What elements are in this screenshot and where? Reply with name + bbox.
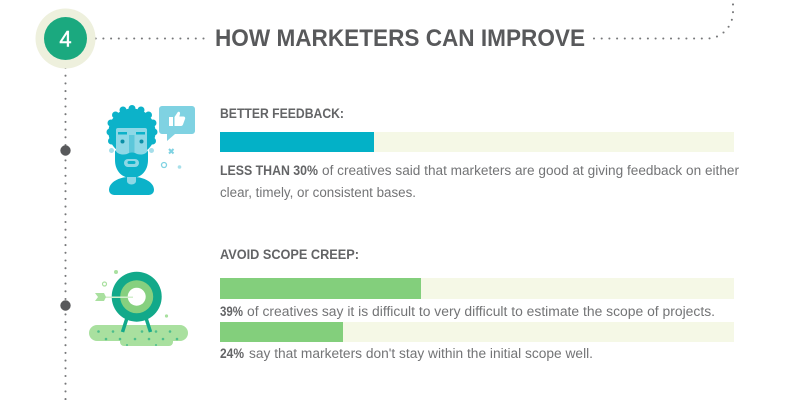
section heading: better feedback: BETTER FEEDBACK: xyxy=(220,106,344,121)
text: feedback stat: LESS THAN 30% xyxy=(220,163,318,178)
text: 39 percent stat: of creatives say it is difficult to very difficult to estimate the scope of projects. xyxy=(247,304,715,319)
text: 24 percent stat: 24% xyxy=(220,346,244,361)
text: 39 percent stat: 39% xyxy=(220,304,243,319)
bar chart: 24 percent xyxy=(220,322,734,342)
timeline marker: scope xyxy=(60,300,71,311)
text: feedback stat xyxy=(220,163,740,200)
section heading: avoid scope creep: AVOID SCOPE CREEP: xyxy=(220,247,359,262)
step number badge xyxy=(36,8,96,68)
icon: thumbs-up speech bubble xyxy=(159,106,195,141)
icon: target with arrow on grass xyxy=(89,270,188,346)
text: 24 percent stat: say that marketers don't stay within the initial scope well. xyxy=(249,346,593,361)
text: feedback stat: clear, timely, or consistent bases. xyxy=(220,185,416,200)
timeline marker: feedback xyxy=(60,145,71,156)
bar chart: 39 percent xyxy=(220,278,734,299)
bar chart: under 30 percent xyxy=(220,132,734,152)
icon: bearded man with thumbs-up bubble xyxy=(106,105,195,195)
title: HOW MARKETERS CAN IMPROVE xyxy=(215,25,585,52)
step number badge: 4 xyxy=(59,26,72,52)
text: feedback stat: of creatives said that marketers are good at giving feedback on either xyxy=(322,163,740,178)
